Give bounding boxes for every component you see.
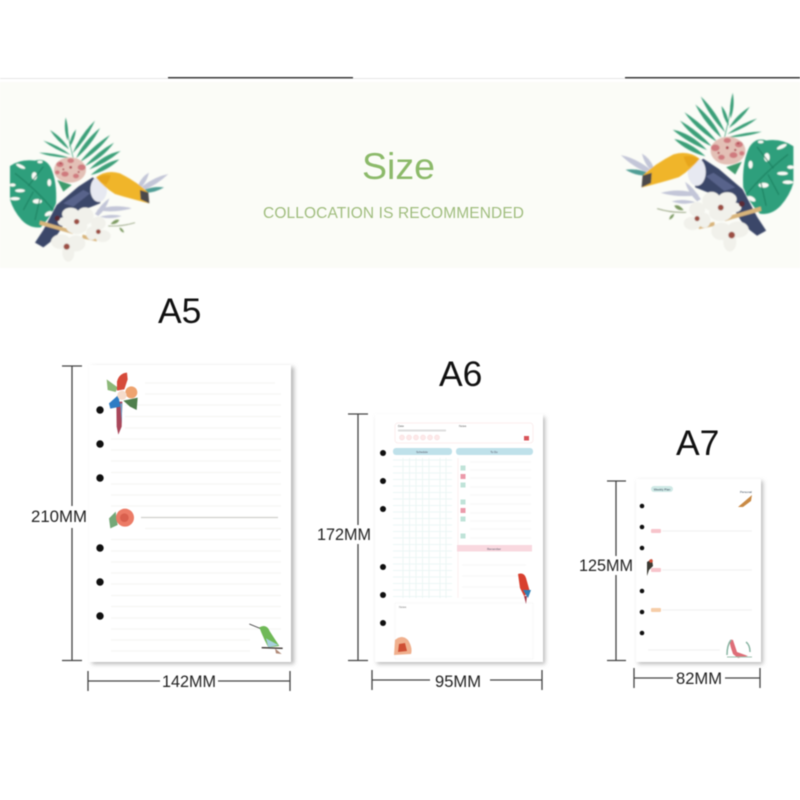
date header box: Notes	[459, 424, 467, 428]
remember bar: Remember	[487, 547, 501, 551]
subtitle: COLLOCATION IS RECOMMENDED	[263, 205, 524, 222]
to-do column	[456, 448, 533, 598]
dimension: 95MM	[372, 670, 542, 691]
panel: A5 page	[31, 291, 294, 691]
remember bar	[457, 545, 532, 598]
illustration: toucan bouquet right	[621, 93, 794, 252]
dimension: 172MM	[317, 414, 371, 660]
banner panel	[0, 82, 800, 268]
illustration: toucan bouquet left	[10, 117, 168, 262]
weekly plan label: Weekly Plan	[654, 488, 671, 492]
dimension: 210MM: 210MM	[31, 508, 87, 526]
ruled lines A5	[111, 383, 281, 651]
schedule column: Schedule	[416, 450, 428, 454]
weekly plan label	[651, 486, 673, 492]
icon: sprig	[738, 495, 752, 507]
heading: A7: A7	[676, 423, 719, 463]
title: Size	[362, 145, 435, 187]
dimension: 125MM	[579, 481, 633, 660]
notes box	[395, 603, 533, 659]
schedule rows	[648, 529, 752, 650]
sheet A7	[636, 479, 763, 664]
icon: parrot	[518, 574, 531, 604]
top rule	[0, 77, 800, 79]
date header box	[395, 423, 533, 443]
date header box: Date	[398, 424, 404, 428]
dimension: 210MM	[31, 366, 87, 660]
to-do column: To Do	[490, 450, 498, 454]
icon: rose	[394, 637, 412, 655]
personal label: Personal	[740, 490, 752, 494]
dimension: 95MM: 95MM	[435, 673, 481, 691]
sheet A5	[89, 365, 294, 664]
dimension: 172MM: 172MM	[317, 526, 371, 544]
panel: A6 page	[317, 354, 545, 691]
binder holes A6	[380, 450, 386, 626]
sheet A6	[375, 414, 545, 664]
heading: A5: A5	[158, 291, 201, 331]
dimension: 142MM	[88, 671, 290, 691]
icon: hummingbird	[249, 624, 283, 654]
icon: rose	[109, 509, 134, 528]
binder holes A7	[640, 504, 644, 635]
heading: A6: A6	[439, 354, 482, 394]
dimension: 82MM: 82MM	[676, 670, 722, 688]
dimension: 125MM: 125MM	[579, 557, 633, 575]
dimension: 142MM: 142MM	[162, 673, 216, 691]
panel: A7 page	[579, 423, 763, 688]
dimension: 82MM	[634, 668, 760, 688]
notes box: Notes	[399, 605, 407, 609]
binder holes A5	[96, 406, 104, 620]
icon: small bird	[647, 559, 653, 576]
icon: flamingo	[727, 640, 752, 658]
icon: parrot and flowers	[107, 373, 138, 435]
schedule column	[393, 448, 452, 598]
